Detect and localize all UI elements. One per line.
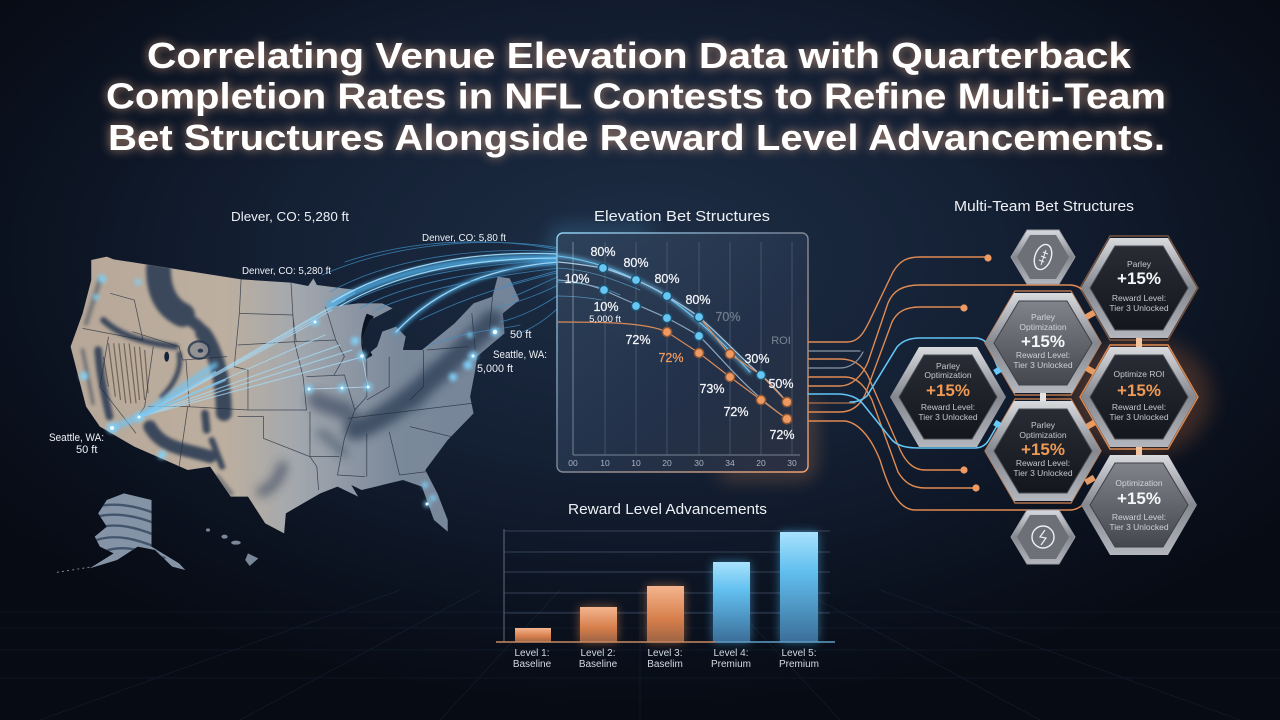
map city labels: 50 ft xyxy=(510,329,531,341)
bar labels: Level 3: xyxy=(647,648,683,659)
hex: parlay left: Reward Level: xyxy=(921,402,975,412)
chart value labels: 72% xyxy=(625,333,651,347)
map city labels xyxy=(49,209,547,456)
map: continental US xyxy=(69,253,523,537)
orange glow around optimize hex xyxy=(1067,337,1211,457)
chart x-axis labels: 20 xyxy=(756,458,766,468)
bar labels: Premium xyxy=(779,659,819,670)
bar labels: Baselim xyxy=(647,659,683,670)
hex: parlay center bottom: Optimization xyxy=(1019,430,1067,440)
chart x-axis labels: 10 xyxy=(600,458,610,468)
bar labels: Premium xyxy=(711,659,751,670)
map: Alaska xyxy=(90,494,186,570)
panel: reward level advancements xyxy=(496,502,835,670)
bar labels: Level 4: xyxy=(713,648,749,659)
hex: parlay left xyxy=(890,347,1006,447)
chart value labels xyxy=(564,245,795,442)
hex: optimization bottom right: Tier 3 Unlocked xyxy=(1109,522,1169,532)
connector end dots xyxy=(960,254,992,492)
hex: parlay center top: +15% xyxy=(1021,332,1065,351)
hex: optimization bottom right: Reward Level: xyxy=(1112,512,1166,522)
chart x-axis labels: 30 xyxy=(694,458,704,468)
hex outlines xyxy=(985,236,1198,503)
hex: parlay top right: Parley xyxy=(1127,259,1152,269)
chart value labels: 10% xyxy=(564,272,590,286)
bar: level 2 xyxy=(580,607,617,642)
panel: elevation map xyxy=(49,209,560,573)
map location markers xyxy=(80,275,500,507)
chart data points xyxy=(598,263,792,424)
chart value labels: 80% xyxy=(685,293,711,307)
hex heading: Multi-Team Bet Structures xyxy=(954,199,1134,215)
Lake Michigan xyxy=(365,315,370,357)
hex: parlay left: Optimization xyxy=(924,370,972,380)
chart value labels: 5,000 ft xyxy=(589,314,621,325)
hex: optimize roi right xyxy=(1081,347,1197,447)
chart x-axis labels: 20 xyxy=(662,458,672,468)
chart blue flow into card xyxy=(558,256,750,372)
icon hex: football bottom xyxy=(1011,510,1075,564)
hex: optimize roi right: +15% xyxy=(1117,381,1161,400)
title: Bet Structures Alongside Reward Level Advancements. xyxy=(108,117,1165,158)
map city labels: Seattle, WA: xyxy=(49,432,104,444)
hex: parlay center top: Reward Level: xyxy=(1016,350,1070,360)
chart value labels: 70% xyxy=(715,310,741,324)
thick arcs xyxy=(330,258,560,333)
bar labels: Level 2: xyxy=(580,648,616,659)
map: western ranges xyxy=(83,268,231,493)
title: Correlating Venue Elevation Data with Quarterback xyxy=(147,35,1132,76)
bar labels: Level 5: xyxy=(781,648,817,659)
chart card xyxy=(557,233,808,472)
hex: parlay center bottom: Tier 3 Unlocked xyxy=(1013,468,1073,478)
title xyxy=(106,35,1166,158)
baseline xyxy=(496,641,835,643)
hex: optimization bottom right: Optimization xyxy=(1115,478,1163,488)
map city labels: Denver, CO: 5,280 ft xyxy=(242,265,331,277)
chart value labels: 80% xyxy=(590,245,616,259)
panel: elevation bet structures chart xyxy=(557,209,808,472)
state borders xyxy=(83,279,492,490)
panel: multi-team bet structures xyxy=(808,199,1211,564)
hex: parlay center bottom xyxy=(985,401,1101,501)
chart glow xyxy=(557,233,808,472)
bar labels xyxy=(513,648,819,670)
chart axes and grid xyxy=(573,242,800,455)
chart value labels: 10% xyxy=(593,300,619,314)
hex: optimize roi right: Optimize ROI xyxy=(1113,369,1165,379)
hex joints xyxy=(993,310,1142,485)
map city labels: 50 ft xyxy=(76,444,97,456)
map: Wyoming basin ring xyxy=(189,341,209,359)
hex: parlay top right: Tier 3 Unlocked xyxy=(1109,303,1169,313)
map city labels: Seattle, WA: xyxy=(493,349,547,361)
hex: parlay center top: Tier 3 Unlocked xyxy=(1013,360,1073,370)
chart x-axis labels: 30 xyxy=(787,458,797,468)
hex: optimize roi right: Reward Level: xyxy=(1112,402,1166,412)
hex: parlay left: Tier 3 Unlocked xyxy=(918,412,978,422)
map city labels: Denver, CO: 5,80 ft xyxy=(422,232,506,244)
map: Hawaii and Aleutian islands xyxy=(57,528,258,572)
bar: level 1 xyxy=(515,628,551,642)
bar: level 3 xyxy=(647,586,684,642)
chart value labels: 72% xyxy=(769,428,795,442)
map city labels: Dlever, CO: 5,280 ft xyxy=(231,209,349,224)
chart value labels: ROI xyxy=(771,335,791,347)
hex: parlay top right xyxy=(1081,238,1197,338)
hex: optimization bottom right xyxy=(1081,455,1197,555)
hex: parlay center bottom: Reward Level: xyxy=(1016,458,1070,468)
hex: optimize roi right: Tier 3 Unlocked xyxy=(1109,412,1169,422)
chart value labels: 80% xyxy=(623,256,649,270)
flow lines across map xyxy=(112,242,560,428)
chart x-axis labels xyxy=(568,458,797,468)
hex: parlay center bottom: +15% xyxy=(1021,440,1065,459)
chart x-axis labels: 00 xyxy=(568,458,578,468)
bar: level 5 xyxy=(780,532,818,642)
hex: parlay center top: Optimization xyxy=(1019,322,1067,332)
chart value labels: 72% xyxy=(658,351,684,365)
hex: parlay left: Parley xyxy=(936,361,961,371)
hatch: Nevada ranges xyxy=(103,343,148,403)
bar labels: Level 1: xyxy=(514,648,550,659)
icon hex: football top xyxy=(1011,230,1075,284)
hex: parlay left: +15% xyxy=(926,381,970,400)
chart value labels: 73% xyxy=(699,382,725,396)
title: Completion Rates in NFL Contests to Refine Multi-Team xyxy=(106,76,1166,116)
bar glows xyxy=(580,532,818,642)
connector lines xyxy=(808,257,1100,510)
bar labels: Baseline xyxy=(579,659,618,670)
hex: parlay top right: +15% xyxy=(1117,269,1161,288)
hex: parlay top right: Reward Level: xyxy=(1112,293,1166,303)
map city labels: 5,000 ft xyxy=(477,363,513,375)
bar labels: Baseline xyxy=(513,659,552,670)
chart heading: Elevation Bet Structures xyxy=(594,209,770,225)
chart value labels: 50% xyxy=(768,377,794,391)
hex: parlay center bottom: Parley xyxy=(1031,420,1056,430)
chart x-axis labels: 34 xyxy=(725,458,735,468)
bar chart grid xyxy=(504,529,830,642)
bar chart heading: Reward Level Advancements xyxy=(568,502,767,518)
hex: optimization bottom right: +15% xyxy=(1117,489,1161,508)
chart x-axis labels: 10 xyxy=(631,458,641,468)
perspective floor grid xyxy=(0,590,1280,720)
hex: parlay center top xyxy=(985,293,1101,393)
map: eastern shading xyxy=(262,320,492,492)
bar: level 4 xyxy=(713,562,750,642)
hex: parlay center top: Parley xyxy=(1031,312,1056,322)
chart value labels: 72% xyxy=(723,405,749,419)
chart value labels: 30% xyxy=(744,352,770,366)
chart value labels: 80% xyxy=(654,272,680,286)
chart series lines xyxy=(558,262,787,419)
